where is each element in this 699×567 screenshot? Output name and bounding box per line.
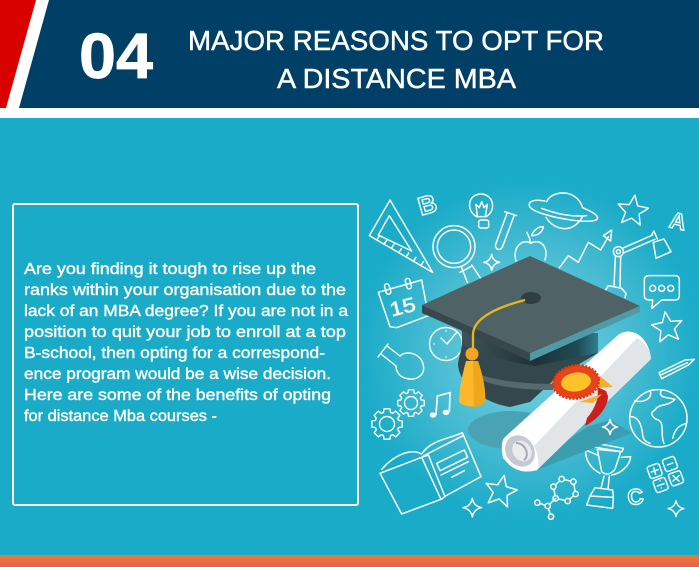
icon: calculator keys <box>647 456 684 493</box>
cap board edge <box>422 305 530 361</box>
icon: set square <box>369 200 433 272</box>
intro paragraph: Here are some of the benefits of opting <box>24 387 331 404</box>
icon: rising arrow <box>559 230 612 268</box>
icon: star <box>650 310 684 343</box>
title: MAJOR REASONS TO OPT FOR <box>188 25 604 56</box>
intro paragraph: position to quit your job to enroll at a top <box>24 324 346 341</box>
icon: calendar <box>378 278 428 328</box>
cap board top <box>422 256 640 353</box>
icon: molecule <box>535 476 578 519</box>
cap button <box>521 292 541 304</box>
panel: intro text box <box>13 204 358 505</box>
icon: sparkle <box>668 501 684 517</box>
scroll roll end <box>499 429 541 473</box>
hat shadow <box>468 411 554 449</box>
icon: letter C: C <box>626 483 645 510</box>
illustration: graduation cap, diploma and study doodles <box>362 180 699 530</box>
icon: clock <box>430 328 462 360</box>
cap band <box>476 373 556 390</box>
icon: trophy <box>586 443 631 508</box>
intro paragraph: Are you finding it tough to rise up the <box>24 261 316 278</box>
icon: open book <box>380 433 481 514</box>
header banner <box>0 0 699 118</box>
section number: 04 <box>79 20 153 92</box>
icon: desk lamp <box>605 231 671 298</box>
icon: sparkle <box>463 498 482 517</box>
intro paragraph <box>24 261 348 425</box>
icon: flask <box>378 344 424 379</box>
intro paragraph: for distance Mba courses - <box>24 408 217 425</box>
icon: light bulb <box>470 194 493 228</box>
background glow <box>362 180 699 530</box>
tassel cord <box>473 300 525 352</box>
intro paragraph: ence program would be a wise decision. <box>24 366 331 383</box>
icon: small gear <box>398 390 424 416</box>
icon: star <box>482 472 520 508</box>
doodle icons: upper group <box>369 189 689 343</box>
ribbon lower tail <box>579 394 602 403</box>
ribbon tails <box>597 376 613 388</box>
icon: ringed planet <box>529 193 598 229</box>
icon: music note <box>430 393 450 418</box>
footer colour strip <box>0 555 699 567</box>
diploma scroll <box>499 331 651 473</box>
navy header panel <box>19 0 699 108</box>
cap brim <box>458 333 598 407</box>
ribbon band <box>585 387 608 426</box>
intro paragraph: ranks within your organisation due to the <box>24 282 346 299</box>
intro paragraph: lack of an MBA degree? If you are not in a <box>24 303 348 320</box>
cap board teal edge <box>530 306 640 361</box>
calendar date: 15 <box>388 294 418 322</box>
icon: large gear <box>372 409 402 439</box>
icon: sparkle on shadow <box>602 420 618 434</box>
icon: test tube <box>495 212 517 249</box>
icon: letter B: B <box>415 189 440 221</box>
diploma shadow <box>537 420 632 470</box>
title <box>188 25 604 94</box>
doodle icons: lower group <box>430 359 694 517</box>
icon: sparkle <box>484 254 500 270</box>
icon: letter A: A <box>667 206 689 235</box>
scroll body <box>505 331 651 472</box>
scroll shaded side <box>532 338 651 470</box>
intro paragraph: B-school, then opting for a correspond- <box>24 345 325 362</box>
icon: speech bubble <box>644 276 679 308</box>
icon: globe <box>630 390 687 447</box>
graduation cap <box>422 256 640 407</box>
title: A DISTANCE MBA <box>277 63 516 94</box>
wax seal <box>551 362 601 402</box>
tassel <box>459 348 485 407</box>
icon: pencil <box>659 359 694 379</box>
icon: star <box>616 193 650 226</box>
icon: magnifying glass <box>433 226 481 282</box>
red accent slant <box>0 0 36 108</box>
icon: apple <box>515 227 546 261</box>
cap crown <box>462 330 598 366</box>
